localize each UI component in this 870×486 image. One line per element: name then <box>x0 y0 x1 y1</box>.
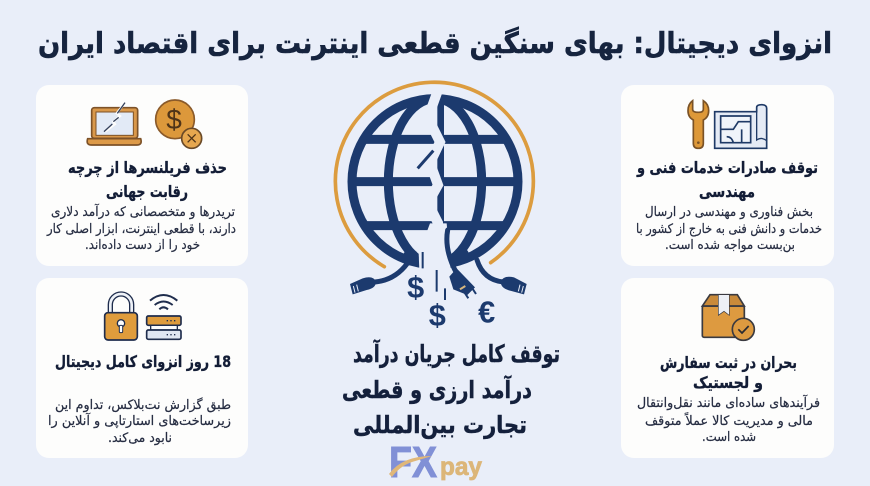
panel: freelancers <box>36 85 248 266</box>
body text: freelancers <box>46 203 236 253</box>
currency symbols: $ <box>429 299 446 333</box>
heading: freelancers: حذف فریلنسرها از چرچه <box>68 158 227 178</box>
illustration: cracked globe with cables and currency <box>335 82 533 333</box>
panel: logistics <box>621 278 834 458</box>
icon: wrench and blueprint <box>688 101 767 148</box>
currency symbols <box>407 271 495 333</box>
orange arc <box>335 82 533 267</box>
heading: freelancers <box>68 158 227 201</box>
currency symbols: $ <box>407 271 424 305</box>
central message: درآمد ارزی و قطعی <box>342 375 532 404</box>
heading: logistics: و لجستیک <box>693 373 763 392</box>
body text: isolation: زیرساخت‌های استارتاپی و آنلاین را <box>48 412 231 429</box>
cables <box>375 230 503 282</box>
body text: logistics: مالی و مدیریت کالا عملاً متوقف <box>645 412 813 429</box>
icon: parcel box with check <box>702 295 754 340</box>
body text: logistics <box>637 394 820 445</box>
heading: logistics <box>660 353 797 392</box>
central message: توقف کامل جریان درآمد <box>353 339 560 368</box>
thin crack splinter <box>418 151 433 168</box>
plugs <box>350 268 527 295</box>
heading: engineering: توقف صادرات خدمات فنی و <box>636 158 818 177</box>
icon: padlock and router <box>105 294 181 340</box>
globe grid <box>352 99 518 265</box>
central message: تجارت بین‌المللی <box>353 411 527 439</box>
central message <box>342 339 560 439</box>
body text: engineering: بن‌بست مواجه شده است. <box>665 238 795 253</box>
heading: freelancers: رقابت جهانی <box>106 182 188 201</box>
body text: engineering: خدمات و دانش فنی به خارج از کشور با <box>636 222 822 237</box>
panel: digital isolation <box>36 278 248 458</box>
heading: engineering <box>636 158 818 201</box>
icon: broken laptop and dollar coin: $ <box>166 104 182 135</box>
heading: engineering: مهندسی <box>699 182 755 201</box>
heading: isolation: 18 روز انزوای کامل دیجیتال <box>55 352 231 371</box>
body text: logistics: فرآیندهای ساده‌ای مانند نقل‌وانتقال <box>637 394 820 411</box>
body text: isolation: نابود می‌کند. <box>108 431 172 446</box>
logo: FXpay: pay <box>440 453 482 481</box>
currency symbols: € <box>478 295 495 329</box>
logo: FXpay <box>389 438 482 486</box>
heading: logistics: بحران در ثبت سفارش <box>660 353 797 372</box>
panel: engineering exports <box>621 85 834 266</box>
body text: engineering: بخش فناوری و مهندسی در ارسال <box>645 205 813 220</box>
crack and lower gap <box>428 90 440 240</box>
body text: freelancers: دارند، با قطعی اینترنت، ابزار اصلی کار <box>46 222 236 237</box>
body text: logistics: شده است. <box>702 430 756 445</box>
thick lower globe ends <box>403 248 469 265</box>
icon: broken laptop and dollar coin <box>87 100 202 148</box>
body text: isolation <box>48 397 231 446</box>
body text: freelancers: تریدرها و متخصصانی که درآمد دلاری <box>51 203 235 220</box>
body text: freelancers: خود را از دست داده‌اند. <box>85 238 200 253</box>
logo: FXpay: FX <box>389 438 437 486</box>
body text: engineering <box>636 205 822 253</box>
body text: isolation: طبق گزارش نت‌بلاکس، تداوم این <box>55 397 231 413</box>
falling dashes <box>423 252 445 300</box>
